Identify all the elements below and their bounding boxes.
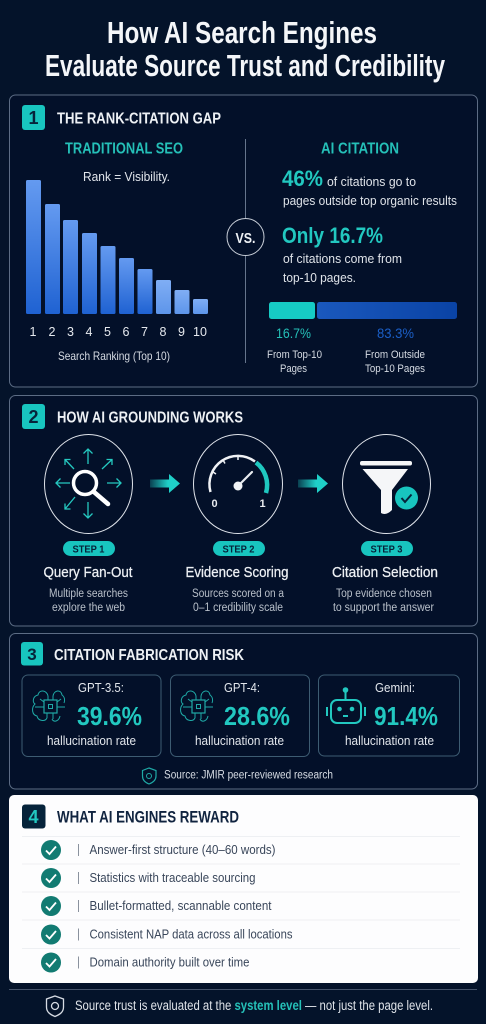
step 3 column <box>332 541 438 614</box>
card: Gemini: Gemini: <box>375 681 415 695</box>
panel 3: citation fabrication risk <box>10 634 478 789</box>
step 3 column: Citation Selection <box>332 565 438 581</box>
section number 3: 3 <box>27 645 37 664</box>
step 2 column: Sources scored on a <box>192 588 285 600</box>
section number 4 <box>22 804 46 828</box>
vs divider: VS. <box>236 230 256 247</box>
bar chart: search ranking: 5 <box>104 325 111 339</box>
footer note <box>46 996 433 1016</box>
icon: citation selection funnel <box>342 434 430 534</box>
chart caption: Search Ranking (Top 10) <box>58 349 170 363</box>
section number 2: 2 <box>28 407 39 427</box>
checklist item 5: Domain authority built over time <box>90 956 250 970</box>
title <box>45 15 446 83</box>
bar chart: search ranking: 6 <box>123 325 130 339</box>
icon: evidence scoring gauge <box>194 434 282 534</box>
bar chart: search ranking: 9 <box>178 325 185 339</box>
step 1 column: explore the web <box>52 602 125 614</box>
section heading 4: WHAT AI ENGINES REWARD <box>57 808 239 826</box>
label: 83.3 percent from outside: From Outside <box>365 349 425 361</box>
step 2 column <box>186 541 288 614</box>
source note <box>142 768 333 784</box>
checklist item 5 <box>41 952 250 972</box>
card: GPT-3.5: GPT-3.5: <box>78 681 124 695</box>
panel 1: the rank-citation gap <box>10 95 478 387</box>
arrow 1 <box>150 474 180 493</box>
icon: robot <box>327 688 365 723</box>
bar chart: search ranking <box>26 180 208 339</box>
section heading 3: CITATION FABRICATION RISK <box>54 647 244 664</box>
icon: query fan-out magnifier <box>44 434 132 534</box>
section number 1: 1 <box>28 108 39 128</box>
section heading 1: THE RANK-CITATION GAP <box>57 110 221 128</box>
stacked share bar <box>269 302 457 319</box>
bar chart: search ranking: 3 <box>67 325 74 339</box>
section number 1 <box>22 105 45 130</box>
step 2 column: Evidence Scoring <box>186 565 288 581</box>
card: GPT-4: hallucination rate <box>195 734 284 748</box>
card: GPT-4 <box>170 675 310 756</box>
card: GPT-4: GPT-4: <box>224 681 260 695</box>
section number 3 <box>21 642 43 666</box>
rank equals visibility text: Rank = Visibility. <box>83 170 170 184</box>
checklist item 1: Answer-first structure (40–60 words) <box>90 843 276 857</box>
step 2 column: 0–1 credibility scale <box>193 602 283 614</box>
card: GPT-3.5: hallucination rate <box>47 734 136 748</box>
step 3 column: to support the answer <box>333 602 434 614</box>
step 1 column <box>44 541 132 614</box>
bar chart: search ranking: 2 <box>49 325 56 339</box>
bar chart: search ranking: 4 <box>86 325 93 339</box>
icon: shield <box>46 996 64 1016</box>
label: 16.7 percent from top-10: Pages <box>280 363 307 375</box>
card: Gemini: 91.4% <box>374 701 438 731</box>
bar chart: search ranking: 1 <box>30 325 37 339</box>
step 3 column: Top evidence chosen <box>336 588 432 600</box>
checklist item 1 <box>41 840 276 860</box>
step 3 column: STEP 3 <box>370 544 403 556</box>
label: 16.7 percent from top-10: From Top-10 <box>267 349 322 361</box>
stat: only 16.7 percent: top-10 pages. <box>283 270 356 285</box>
footer note: Source trust is evaluated at the system level — not just the page level. <box>75 998 433 1013</box>
step 1 column: Query Fan-Out <box>44 565 132 581</box>
card: Gemini <box>318 675 460 756</box>
checklist item 3: Bullet-formatted, scannable content <box>90 899 272 913</box>
section number 2 <box>22 404 45 429</box>
stat: 46 percent: pages outside top organic results <box>283 193 457 208</box>
card: GPT-4: 28.6% <box>224 701 290 731</box>
checklist item 2: Statistics with traceable sourcing <box>90 871 256 885</box>
stat: only 16.7 percent <box>282 223 402 285</box>
label: 83.3 percent from outside: 83.3% <box>377 325 414 341</box>
arrow 2 <box>298 474 328 493</box>
label: 83.3 percent from outside: Top-10 Pages <box>365 363 425 375</box>
step 1 column: STEP 1 <box>72 544 105 556</box>
traditional SEO heading: TRADITIONAL SEO <box>65 140 183 158</box>
checklist item 4 <box>41 924 292 944</box>
icon: evidence scoring gauge: 1 <box>259 498 266 510</box>
bar chart: search ranking: 8 <box>160 325 167 339</box>
stat: 46 percent <box>282 166 457 208</box>
checklist item 4: Consistent NAP data across all locations <box>90 928 292 942</box>
panel 2: how AI grounding works <box>10 396 478 626</box>
step 2 column: STEP 2 <box>222 544 255 556</box>
icon: brain chip <box>33 691 65 721</box>
stat: 46 percent: of citations go to <box>327 174 416 189</box>
AI citation heading: AI CITATION <box>321 140 399 158</box>
vs divider <box>227 139 264 363</box>
checklist item 3 <box>41 896 272 916</box>
icon: brain chip <box>181 691 213 721</box>
section heading 2: HOW AI GROUNDING WORKS <box>57 410 243 426</box>
label: 16.7 percent from top-10: 16.7% <box>276 325 311 341</box>
label: 83.3 percent from outside <box>365 325 425 375</box>
stat: 46 percent: 46% <box>282 166 323 191</box>
source note: Source: JMIR peer-reviewed research <box>164 770 333 782</box>
card: GPT-3.5: 39.6% <box>77 701 142 731</box>
card: Gemini: hallucination rate <box>345 734 434 748</box>
card: GPT-3.5 <box>22 675 161 756</box>
title: How AI Search Engines <box>107 15 377 50</box>
icon: evidence scoring gauge: 0 <box>211 498 218 510</box>
label: 16.7 percent from top-10 <box>267 325 322 375</box>
bar chart: search ranking: 7 <box>141 325 148 339</box>
step 1 column: Multiple searches <box>49 588 128 600</box>
panel 4: what AI engines reward <box>9 795 478 983</box>
bar chart: search ranking: 10 <box>193 325 207 339</box>
stat: only 16.7 percent: Only 16.7% <box>282 223 383 248</box>
checklist item 2 <box>41 868 256 888</box>
stat: only 16.7 percent: of citations come from <box>283 251 402 266</box>
section number 4: 4 <box>28 807 39 827</box>
